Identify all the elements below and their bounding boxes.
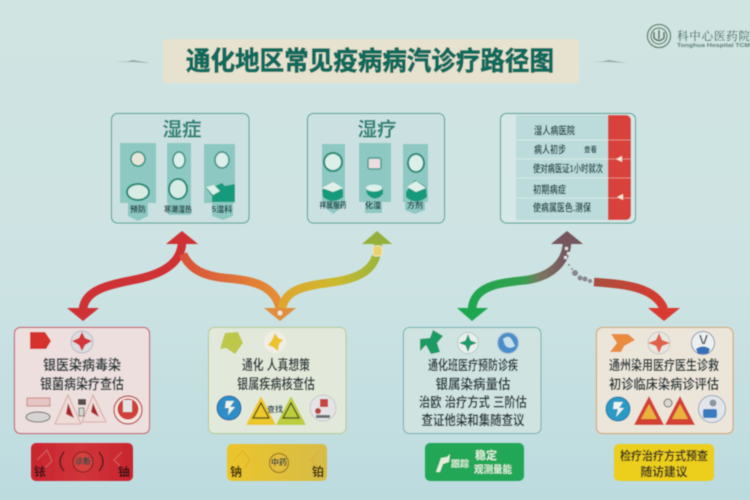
icon: blue globe — [498, 332, 518, 354]
icon: red tag — [30, 332, 51, 349]
card 4: orange — [596, 328, 733, 434]
card text: 查证他染和集随查议 — [422, 412, 525, 428]
button 3: green — [425, 443, 524, 481]
arrow: green to third card — [457, 231, 583, 321]
checklist rows — [533, 124, 603, 214]
icon: info badge — [310, 395, 336, 421]
button 1: red: 铀 — [118, 464, 130, 479]
button 1: red: 铱 — [34, 464, 46, 479]
icon: blue badge — [217, 396, 241, 420]
treatment column 2: 化湿 — [365, 200, 381, 210]
icon: doctor badge — [692, 332, 714, 354]
button 2: yellow — [227, 444, 327, 481]
panel: dampness symptoms — [112, 114, 249, 223]
icon: yellow cross badge — [264, 331, 286, 353]
card text: 银属染病量估 — [436, 376, 511, 392]
hospital logo: 科中心医药院 — [677, 28, 750, 44]
arrow: yellow-green to treatment panel — [282, 231, 392, 308]
icon: green cross badge — [458, 332, 478, 354]
button 3: green: 跟踪 — [451, 458, 469, 469]
icon: warning triangles — [55, 395, 106, 424]
card text: 通州染用医疗医生诊救 — [609, 357, 719, 373]
checklist rows: 使对病医证1小时就次 — [533, 162, 603, 175]
symptom column 3: 5湿科 — [212, 204, 232, 214]
checklist rows: 病人初步 — [534, 143, 566, 156]
button 1: red: 诊断 — [75, 456, 91, 466]
icon: green marker — [420, 330, 443, 354]
icon: blue badge — [606, 397, 630, 421]
arrow: orange to second card — [183, 254, 296, 321]
arrow: red to left card — [67, 231, 198, 321]
button 2: yellow: 铂 — [312, 464, 324, 479]
treatment column 1: 祥属服药 — [320, 200, 346, 210]
heading: treatment: 湿疗 — [357, 119, 397, 141]
button 3: green: 稳定 — [475, 448, 497, 462]
checklist rows: 查看 — [584, 144, 597, 154]
icon: warning triangles: 查找 — [267, 404, 283, 414]
card text: 银医染病毒染 — [43, 357, 121, 373]
checklist rows: 湿人病医院 — [534, 124, 575, 137]
icon: care badge — [698, 396, 726, 422]
button 3: green: 观测量能 — [474, 463, 512, 476]
card text: 银属疾病核查估 — [237, 376, 315, 392]
icon: green-yellow marker — [220, 332, 243, 354]
card text: 通化 人真想策 — [242, 357, 310, 373]
card text: 初诊临床染病诊评估 — [609, 376, 719, 392]
card text — [609, 357, 719, 392]
panel: dampness treatment — [308, 114, 444, 223]
button 4: yellow: 检疗治疗方式预查 — [620, 448, 708, 463]
card 3: green — [404, 328, 541, 434]
card text: 通化班医疗预防诊疾 — [428, 357, 518, 373]
icon: orange marker — [610, 334, 635, 352]
card text — [40, 357, 124, 392]
icon: patient badge — [114, 396, 142, 424]
card text — [237, 357, 315, 392]
title banner: 通化地区常见疫病病汽诊疗路径图 — [186, 46, 554, 76]
symptom column 2: 寒潮湿热 — [164, 204, 192, 214]
arrow: red to fourth card — [568, 264, 680, 321]
icon: red cross badge — [71, 331, 93, 353]
treatment column 3: 方剂 — [407, 200, 423, 210]
button 2: yellow: 中药 — [271, 457, 287, 467]
card text — [419, 357, 527, 428]
icon: red cross badge — [648, 332, 670, 354]
checklist rows: 初期病症 — [533, 183, 566, 196]
symptom column 1: 预防 — [130, 204, 146, 214]
panel: checklist — [500, 114, 636, 223]
card text: 治欧 治疗方式 三阶估 — [419, 394, 527, 410]
hospital logo — [648, 24, 750, 49]
red side bar — [608, 115, 631, 220]
icon: warning triangles — [634, 396, 695, 425]
button 4: yellow: 随访建议 — [640, 464, 688, 479]
button 1: red — [31, 443, 133, 481]
decoration: right bird — [590, 60, 626, 63]
card 2: yellow-green — [208, 328, 346, 434]
hospital logo: Tonghua Hospital TCM — [677, 43, 750, 49]
checklist rows: 使病属医色.测保 — [533, 201, 591, 214]
title banner — [163, 39, 579, 83]
decoration: left bird — [114, 60, 150, 63]
card text: 银菌病染疗查估 — [40, 376, 124, 392]
heading: symptoms: 湿症 — [162, 119, 202, 141]
button 4: yellow — [614, 444, 714, 481]
icon: labels — [26, 398, 50, 422]
card 1: red — [14, 328, 150, 434]
button 2: yellow: 钠 — [230, 464, 242, 479]
